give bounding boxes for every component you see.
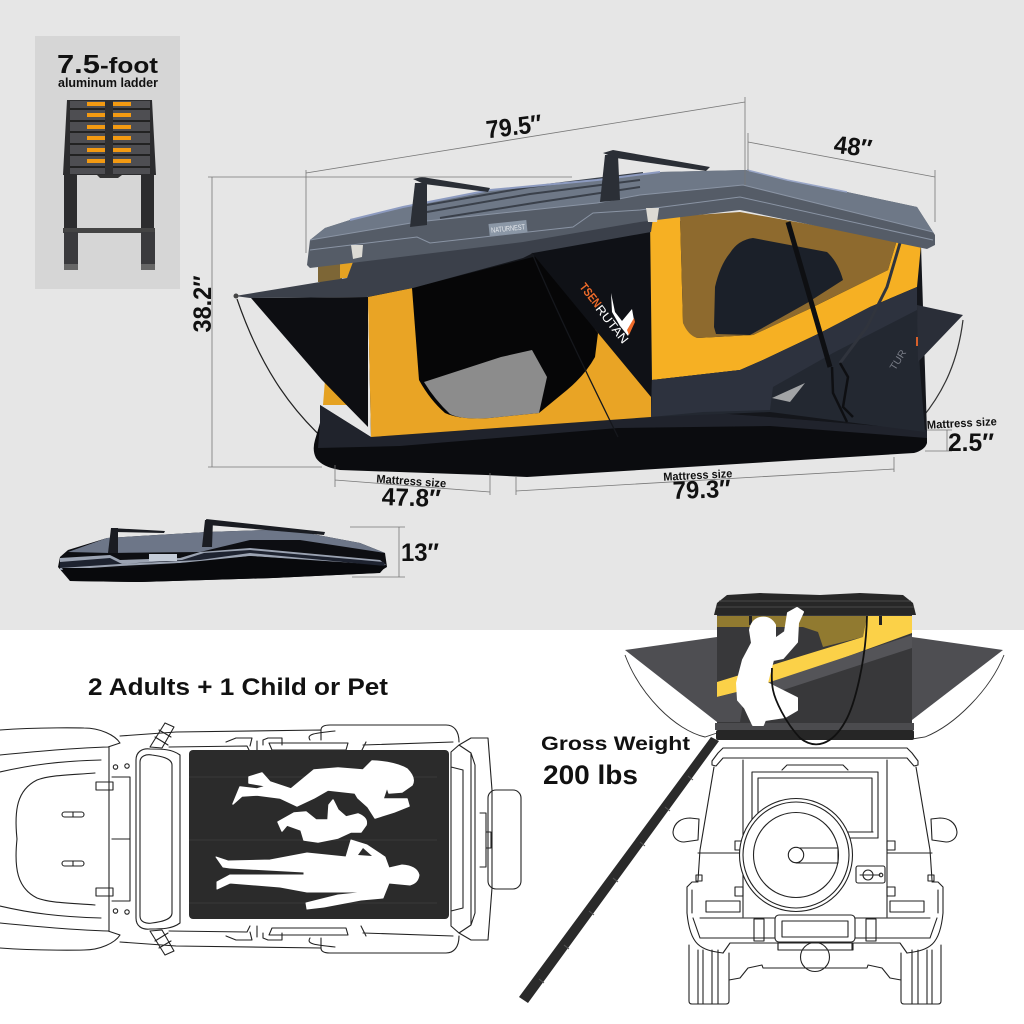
- silhouette: woman: [233, 761, 413, 818]
- dimension: 38.2 in: 38.2″: [189, 275, 217, 332]
- silhouette: child: [278, 800, 366, 842]
- panel: ladder: [35, 36, 180, 289]
- small yellow side: [323, 380, 348, 405]
- right awning wing: [917, 305, 963, 362]
- folded tent roof rack: [108, 519, 325, 553]
- brand plate: NATURNEST: [491, 222, 526, 235]
- side grey triangle: [772, 383, 805, 402]
- side lower dark fabric: [651, 287, 925, 432]
- side inner dark window: [714, 238, 843, 335]
- front window grey mesh: [424, 350, 547, 418]
- man arm gap: [358, 848, 372, 856]
- folded tent plate: [149, 554, 177, 561]
- shell highlight lines: [310, 185, 933, 250]
- vehicle outline upper half: [0, 723, 492, 839]
- gross weight label: Gross Weight: [541, 733, 691, 755]
- tent base black: [314, 405, 927, 477]
- dimension: mattress length: 79.3″: [672, 475, 731, 505]
- dimension: mattress width: 47.8″: [381, 483, 441, 513]
- side logo: [888, 337, 918, 373]
- mat rails: [189, 777, 437, 903]
- logo text: TSEN: [577, 280, 604, 310]
- side logo: TUR: [888, 348, 909, 373]
- side yellow panel: [650, 216, 921, 380]
- dimension: mattress length: Mattress size: [663, 468, 733, 484]
- rear corner fabric: [318, 262, 342, 282]
- ladder heading: 7.5 -foot: [57, 49, 159, 79]
- dimension: mattress width: Mattress size: [376, 474, 447, 490]
- capacity heading: 2 Adults + 1 Child or Pet: [88, 674, 388, 701]
- dimension: mattress thickness: Mattress size: [927, 416, 997, 432]
- rear view tent: [625, 593, 1004, 744]
- dimension: mattress width: [376, 474, 447, 513]
- awning: [235, 218, 653, 298]
- dimension: mattress thickness: [927, 416, 997, 457]
- dimension: mattress length: [663, 468, 733, 505]
- tent shell: [714, 593, 916, 615]
- rear hitch: [480, 813, 491, 867]
- roof shell base: [307, 170, 935, 268]
- black wing with logo: [532, 228, 651, 397]
- panel: open tent photo: RUTAN: [593, 302, 631, 346]
- telescopic ladder: [519, 737, 719, 1003]
- dimension: 48 in: 48″: [832, 131, 874, 163]
- latches: [749, 616, 882, 625]
- dimension: folded height: 13″: [401, 539, 439, 567]
- side straps: [788, 222, 900, 422]
- window lower edge: [752, 832, 878, 838]
- icon: ladder: [63, 100, 156, 270]
- tent base navy band: [318, 405, 927, 448]
- silhouette: man: [216, 840, 419, 909]
- tent yellow band: [717, 616, 912, 697]
- panel: open tent photo: [234, 150, 963, 477]
- fuel door: [856, 866, 885, 883]
- vehicle outline left half: [673, 748, 815, 1004]
- front window black: [412, 256, 598, 418]
- rope: [772, 616, 867, 744]
- upper grey background panel: [0, 0, 1024, 630]
- vehicle outline lower half: [0, 839, 492, 955]
- gross weight value: 200 lbs: [543, 760, 638, 790]
- spare wheel: [740, 798, 852, 912]
- vehicle outline right half: [815, 748, 957, 1004]
- roof ribs: [427, 173, 643, 218]
- tent left wing: [625, 637, 717, 722]
- rear view vehicle: [673, 748, 957, 1004]
- panel: folded tent: [58, 519, 387, 582]
- tent body: [717, 615, 912, 723]
- front yellow panel: [368, 288, 651, 437]
- dimension: mattress thickness: 2.5″: [948, 429, 994, 457]
- brand plate: [488, 220, 528, 236]
- left wing black: [251, 297, 368, 427]
- latches: [351, 208, 659, 259]
- ladder subheading: aluminum ladder: [58, 76, 158, 90]
- tent mesh: [717, 616, 867, 647]
- tent right wing: [912, 637, 1003, 720]
- side mesh window: [680, 212, 897, 338]
- wing cords: [625, 655, 1004, 739]
- roof rack: [410, 150, 710, 227]
- silhouette: person installing: [737, 608, 803, 725]
- spare tire: [488, 790, 521, 889]
- tent base: [715, 723, 914, 730]
- guy rope left: [237, 299, 360, 468]
- dimension lines: [208, 97, 952, 577]
- top view vehicle: [0, 723, 521, 955]
- tent body backing: [368, 218, 927, 440]
- license plate and bumper: [775, 915, 855, 972]
- roof mat: [189, 750, 449, 919]
- roof top highlight: [350, 172, 660, 220]
- dimension: 79.5 in: 79.5″: [485, 110, 544, 144]
- awning corner tie: [234, 294, 238, 298]
- tent grey band: [767, 635, 912, 692]
- lower white panel: [0, 630, 1024, 1024]
- center guy rope: [532, 253, 618, 437]
- side lower flap highlight: [651, 287, 917, 417]
- guy rope right: [922, 320, 963, 418]
- logo mark: [611, 293, 635, 336]
- roof shell top surface: [310, 170, 933, 240]
